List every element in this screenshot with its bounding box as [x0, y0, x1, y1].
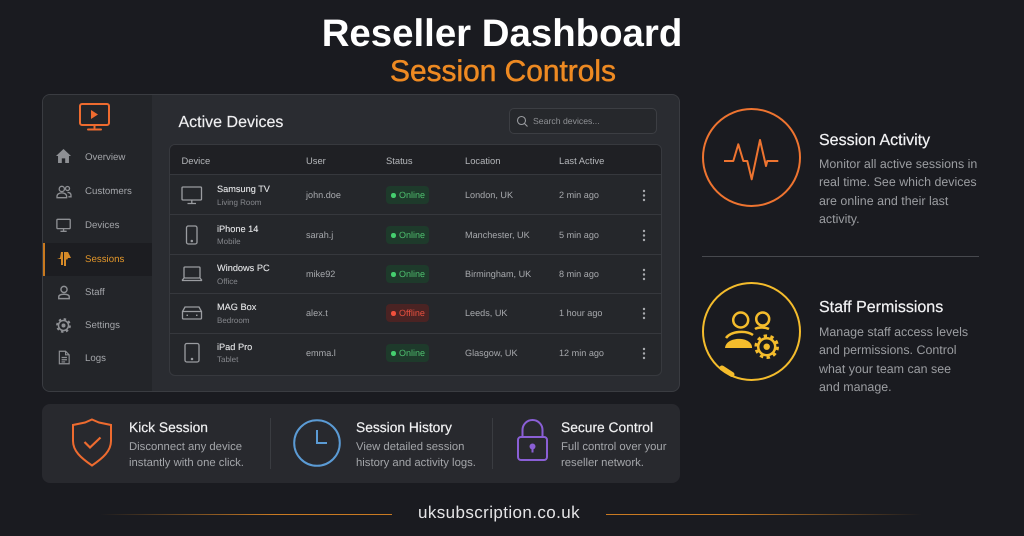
row 3 menu [642, 268, 646, 280]
row 2 device type: Mobile [217, 237, 241, 246]
nav: sessions: Sessions [85, 254, 124, 264]
row 5 device type: Tablet [217, 355, 238, 364]
feature text: session history [356, 441, 476, 469]
icon: search [517, 116, 528, 127]
icon: shield [72, 418, 112, 467]
nav: customers: Customers [85, 186, 132, 196]
icon: session activity [702, 108, 801, 207]
row 2 last active: 5 min ago [559, 230, 599, 240]
column header: status: Status [386, 154, 413, 166]
column header: location: Location [465, 154, 500, 166]
text: staff permissions: Manage staff access levels [819, 325, 968, 339]
feature text: session history: View detailed session [356, 441, 464, 453]
footer url: uksubscription.co.uk [418, 503, 580, 522]
row 1 menu [642, 190, 646, 202]
row 2 location: Manchester, UK [465, 230, 530, 240]
feature text: kick session [129, 441, 244, 469]
icon: logo monitor [79, 103, 110, 130]
row 5 user: emma.l [306, 348, 336, 358]
icon: settings [56, 318, 71, 333]
row 2 menu [642, 230, 646, 242]
row 1 location: London, UK [465, 190, 513, 200]
row 5 menu [642, 348, 646, 360]
nav: logs: Logs [85, 352, 106, 364]
feature text: kick session: Disconnect any device [129, 441, 242, 453]
nav: settings: Settings [85, 320, 120, 330]
row 1 user: john.doe [306, 190, 341, 200]
text: staff permissions [819, 325, 968, 394]
nav: overview: Overview [85, 152, 125, 162]
row 2 user: sarah.j [306, 230, 333, 240]
row 3 device type: Office [217, 276, 238, 286]
text: session activity: Monitor all active sessions in [819, 157, 977, 171]
icon: staff [58, 286, 70, 300]
row 3 icon: laptop [182, 266, 202, 282]
row 4 device type: Bedroom [217, 316, 249, 324]
text: session activity: activity. [819, 212, 860, 226]
row 3 device name: Windows PC [217, 262, 270, 272]
row 4 location: Leeds, UK [465, 308, 507, 318]
feature heading: kick session: Kick Session [129, 420, 208, 434]
text: session activity: are online and their last [819, 194, 948, 208]
row 1 device name: Samsung TV [217, 184, 270, 194]
column header: last active: Last Active [559, 154, 604, 166]
heading: staff permissions: Staff Permissions [819, 298, 943, 316]
row 4 user: alex.t [306, 308, 328, 318]
text: session activity [819, 157, 977, 226]
row 5 device name: iPad Pro [217, 342, 252, 352]
text: staff permissions: and permissions. Control [819, 343, 957, 357]
text: session activity: real time. See which devices [819, 175, 977, 189]
subtitle: Session Controls [390, 55, 616, 88]
table header background [170, 145, 663, 174]
row 2 status: Online [399, 230, 425, 240]
footer line right [606, 514, 922, 515]
icon: devices [56, 218, 71, 232]
row 5 icon: tablet [184, 342, 200, 363]
panel: sidebar background [43, 95, 152, 393]
heading: session activity: Session Activity [819, 132, 930, 148]
feature heading: secure control: Secure Control [561, 420, 653, 434]
feature text: session history: history and activity logs. [356, 457, 476, 469]
row 3 last active: 8 min ago [559, 268, 599, 278]
feature text: secure control: Full control over your [561, 441, 666, 453]
active nav highlight [43, 243, 152, 276]
footer line left [100, 514, 392, 515]
panel: bottom features [42, 404, 680, 483]
row 5 status: Online [399, 348, 425, 358]
row 2 status [386, 226, 429, 244]
nav: devices: Devices [85, 220, 119, 230]
row 1 status: Online [399, 190, 425, 200]
row 1 status [386, 186, 429, 204]
icon: overview home [56, 149, 71, 163]
nav: staff: Staff [85, 286, 105, 298]
row 4 menu [642, 308, 646, 320]
row 1 icon: tv [181, 186, 202, 204]
row 5 location: Glasgow, UK [465, 348, 518, 358]
icon: clock [293, 419, 341, 467]
feature heading: session history: Session History [356, 420, 452, 434]
row 5 status [386, 344, 429, 362]
icon: staff permissions [702, 282, 801, 381]
row 5 last active: 12 min ago [559, 348, 604, 358]
row 3 status: Online [399, 269, 425, 279]
row 4 status: Offline [399, 308, 425, 318]
column header: user: User [306, 154, 326, 166]
row 4 icon: mag box [182, 306, 202, 320]
search box [509, 108, 657, 134]
divider [702, 256, 979, 257]
row 2 device name: iPhone 14 [217, 224, 258, 234]
title: Reseller Dashboard [322, 12, 682, 54]
table [169, 144, 662, 376]
icon: padlock [517, 419, 548, 461]
row 2 icon: phone [186, 225, 198, 245]
icon: sessions [57, 252, 71, 266]
row 3 location: Birmingham, UK [465, 268, 531, 278]
heading: active devices: Active Devices [178, 114, 283, 131]
search placeholder: Search devices... [533, 116, 600, 126]
row 4 device name: MAG Box [217, 302, 256, 312]
row 3 status [386, 265, 429, 283]
text: staff permissions: what your team can see [819, 362, 951, 376]
row 4 last active: 1 hour ago [559, 308, 602, 318]
column header: device: Device [182, 154, 210, 166]
panel: dashboard [42, 94, 680, 392]
row 4 status [386, 304, 429, 322]
row 3 user: mike92 [306, 268, 335, 278]
feature text: secure control [561, 441, 666, 469]
icon: customers [56, 186, 72, 198]
text: staff permissions: and manage. [819, 380, 892, 394]
feature text: secure control: reseller network. [561, 457, 644, 469]
feature text: kick session: instantly with one click. [129, 457, 244, 469]
row 1 device type: Living Room [217, 198, 261, 206]
row 1 last active: 2 min ago [559, 190, 599, 200]
icon: logs [58, 350, 70, 364]
